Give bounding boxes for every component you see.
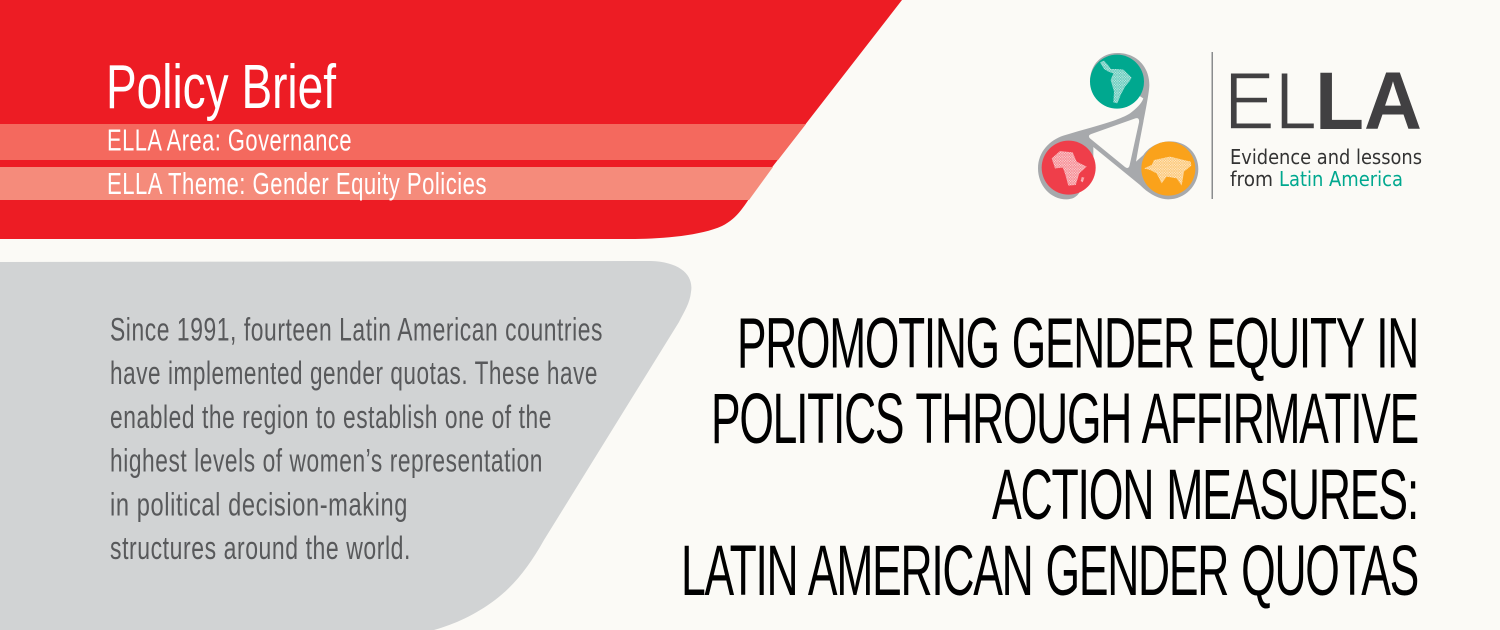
logo tagline: Evidence and lessons [1230, 145, 1422, 169]
text: summary paragraph: highest levels of women’s representation [110, 442, 543, 478]
icon: teal Latin America circle [1090, 55, 1144, 109]
logo wordmark: EL [1224, 56, 1317, 147]
logo: ELLA [1038, 52, 1422, 199]
logo divider [1212, 52, 1213, 199]
icon: red Africa circle [1042, 141, 1096, 195]
logo tagline: from [1230, 167, 1273, 191]
heading: Policy Brief: Policy Brief [106, 53, 337, 122]
text: summary paragraph: structures around the world. [110, 530, 411, 566]
text: summary paragraph: have implemented gender quotas. These have [110, 355, 598, 391]
logo wordmark [1224, 56, 1422, 147]
text: ELLA theme: ELLA Theme: Gender Equity Policies [107, 166, 487, 201]
logo wordmark: LA [1315, 56, 1422, 147]
text: summary paragraph: enabled the region to establish one of the [110, 399, 552, 435]
panel: red header banner [0, 0, 902, 239]
band: ELLA theme [0, 167, 773, 200]
band: ELLA area [0, 124, 806, 160]
icon: orange Eurasia circle [1141, 142, 1195, 196]
text: summary paragraph: Since 1991, fourteen Latin American countries [110, 312, 603, 348]
text: summary paragraph: in political decision-making [110, 486, 408, 522]
text: summary paragraph [110, 312, 603, 566]
panel: gray summary [0, 261, 691, 630]
icon: triskele with continents [1038, 53, 1198, 199]
logo tagline: Latin America [1279, 167, 1403, 191]
text: ELLA area: ELLA Area: Governance [107, 122, 352, 158]
logo tagline [1230, 145, 1422, 191]
title [681, 304, 1418, 611]
